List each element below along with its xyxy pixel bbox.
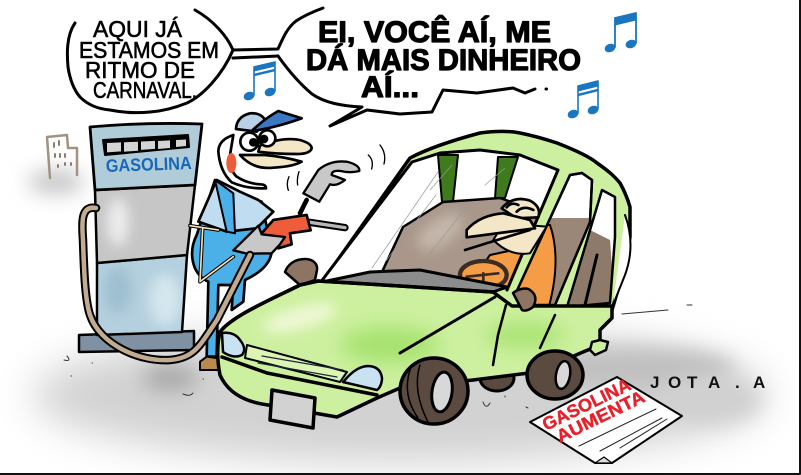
rear bumper <box>590 340 608 355</box>
cap <box>236 111 302 132</box>
car roof and pillars <box>320 132 630 310</box>
overalls <box>192 180 272 357</box>
door mirror <box>513 289 535 311</box>
rear wheel <box>527 351 583 399</box>
speech text: central: EI, VOCÊ AÍ, ME <box>318 15 551 49</box>
arm rod fill <box>190 226 233 282</box>
front seats <box>382 196 536 290</box>
nozzle spout <box>310 222 345 228</box>
motion marks <box>287 145 385 190</box>
arm rod <box>190 226 233 282</box>
fuel pump <box>79 123 202 352</box>
grille lines <box>258 356 343 377</box>
rear pillars <box>438 155 518 202</box>
signature: JOTA . A <box>650 373 765 392</box>
head <box>218 135 266 188</box>
overall straps <box>215 180 235 233</box>
license plate <box>270 390 315 428</box>
body shading <box>260 298 565 363</box>
side window two <box>566 188 616 304</box>
shoe <box>200 357 218 370</box>
seat highlight <box>415 211 465 253</box>
speech text: central <box>306 15 581 104</box>
music note top right <box>604 13 637 53</box>
car <box>218 132 630 428</box>
pointing glove <box>303 161 359 202</box>
speech text: central: DÁ MAIS DINHEIRO <box>306 43 581 77</box>
newspaper headline: GASOLINA <box>539 375 634 435</box>
speech text: attendant: RITMO DE <box>85 57 195 83</box>
steering wheel <box>460 261 507 289</box>
nozzle spout fill <box>310 222 345 228</box>
gripping glove <box>233 226 285 254</box>
music note lower right <box>567 81 599 119</box>
speech text: attendant <box>79 16 219 103</box>
newspaper <box>530 375 682 463</box>
ground shadow <box>32 327 768 463</box>
body outline redraw <box>220 281 493 332</box>
newspaper headline: AUMENTA <box>553 387 648 447</box>
speech text: central: AÍ... <box>361 70 419 104</box>
grille <box>245 345 347 382</box>
pump head <box>90 123 202 190</box>
door lines <box>493 305 555 365</box>
glass streaks <box>372 165 505 268</box>
speech text: attendant: CARNAVAL. <box>93 77 197 103</box>
windshield <box>320 148 560 292</box>
open mouth <box>226 153 236 173</box>
ground marks <box>64 305 692 408</box>
bumper line <box>222 357 377 395</box>
speech bubble: attendant <box>67 8 323 113</box>
pump display <box>103 135 189 155</box>
headlight left <box>222 333 244 356</box>
driver head <box>465 199 547 254</box>
pump label: GASOLINA <box>105 153 192 176</box>
side window one <box>516 172 594 304</box>
headlight right <box>343 366 382 390</box>
pump middle panel <box>95 185 195 263</box>
roof rear edge <box>613 215 630 305</box>
speech bubble: central <box>278 56 546 126</box>
hose <box>82 208 250 360</box>
driver torso <box>486 250 520 290</box>
background building <box>28 135 84 194</box>
shirt <box>198 180 273 232</box>
jaw <box>240 155 302 168</box>
front wheel <box>400 358 468 424</box>
speech text: attendant: AQUI JÁ <box>93 16 183 42</box>
pointing glove arm <box>300 200 307 213</box>
attendant <box>190 111 385 370</box>
eyes <box>240 130 275 151</box>
speech text: attendant: ESTAMOS EM <box>79 37 219 63</box>
far wheel <box>480 365 514 391</box>
mirror left <box>285 259 317 285</box>
pump lower panel <box>97 255 187 335</box>
pump base <box>79 331 194 352</box>
hood crease <box>400 297 495 353</box>
music note left <box>243 62 276 101</box>
newspaper fold <box>595 457 612 463</box>
newspaper text lines <box>579 409 667 451</box>
nozzle <box>262 215 311 248</box>
dashboard <box>322 270 507 292</box>
car body <box>218 281 612 417</box>
nose <box>258 139 312 154</box>
